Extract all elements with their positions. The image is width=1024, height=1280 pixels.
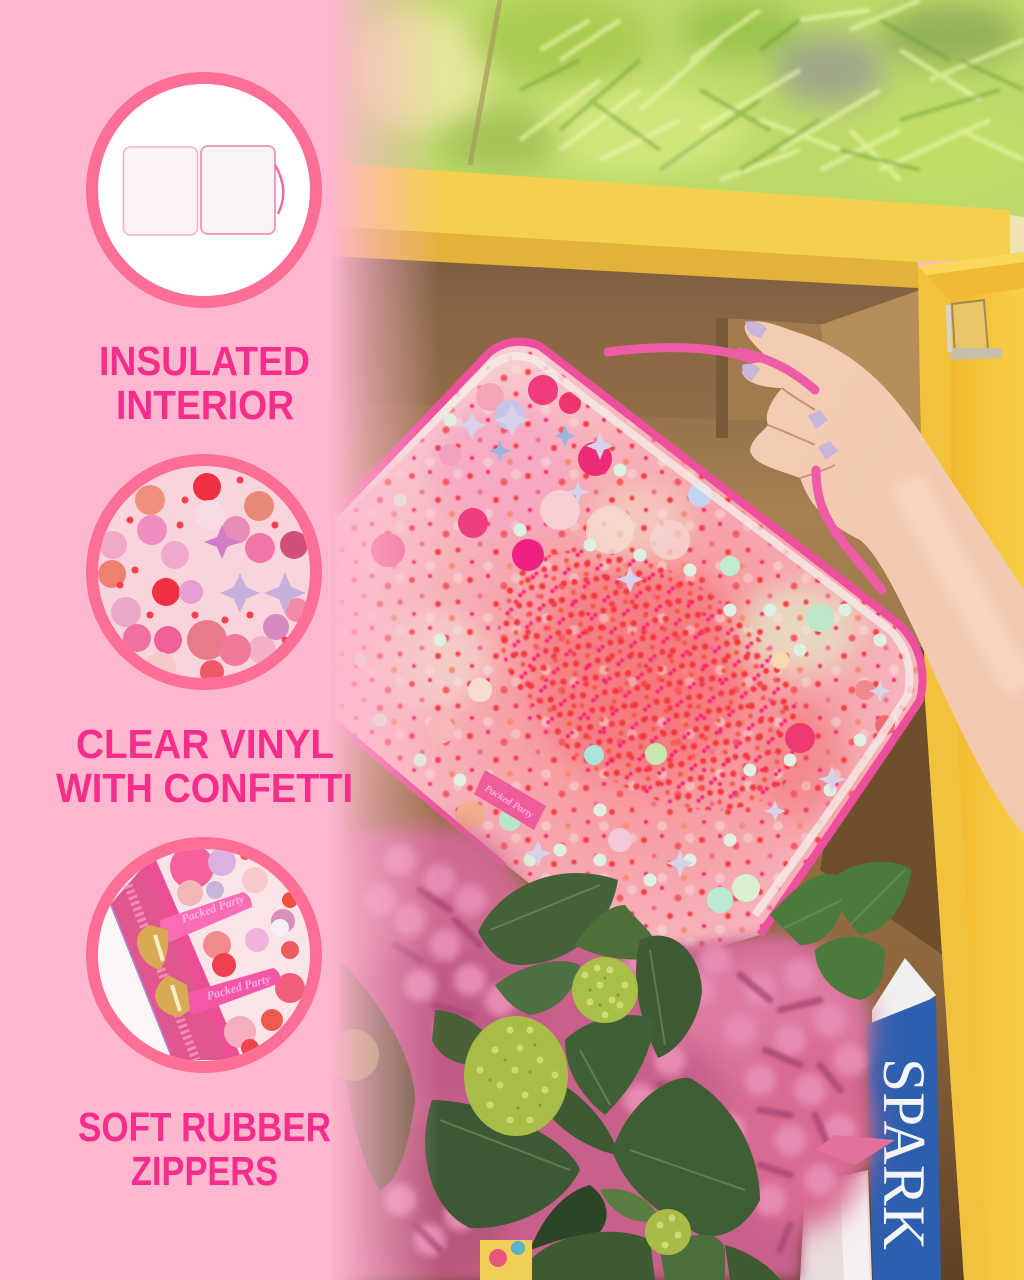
large confetti <box>371 375 895 913</box>
open bag right panel <box>201 146 275 234</box>
stipple confetti <box>340 351 918 947</box>
lower books <box>800 1170 872 1280</box>
small colourful book <box>480 1240 532 1280</box>
heading: WITH CONFETTI <box>56 765 353 811</box>
heading: ZIPPERS <box>131 1148 278 1194</box>
heading <box>56 721 353 811</box>
heading: SOFT RUBBER <box>78 1104 331 1150</box>
open bag left panel <box>124 147 198 235</box>
brand on pull: Packed Party <box>205 971 273 1003</box>
arm and hand <box>742 321 1024 835</box>
bag pink zipper edge <box>335 342 922 935</box>
leaf veins <box>440 870 905 1190</box>
feature 3: soft rubber zippers <box>78 837 331 1194</box>
bag white inner edge <box>335 356 910 915</box>
door latch <box>948 300 1002 360</box>
handle <box>608 348 882 590</box>
blue book <box>866 958 941 1280</box>
stars <box>457 404 891 877</box>
fingernails <box>742 321 838 460</box>
light petals <box>380 860 850 1240</box>
feature 1: insulated interior <box>86 72 322 428</box>
heading <box>99 338 310 428</box>
brand tag <box>474 770 546 830</box>
locker door <box>918 252 1024 1280</box>
locker top rim <box>330 163 1024 288</box>
icon ring: zipper close-up <box>86 837 322 1073</box>
handle strap over hand <box>740 352 882 590</box>
heading: INTERIOR <box>116 382 294 428</box>
hydrangea leaves <box>339 862 912 1280</box>
brand tag: Packed Party <box>482 783 535 821</box>
feature 2: clear vinyl with confetti <box>56 454 353 811</box>
pale iridescent dots <box>360 420 880 880</box>
dark petal gaps <box>395 890 840 1250</box>
open bag handle <box>275 165 283 214</box>
lunch bag <box>330 340 930 980</box>
icon ring: confetti close-up <box>86 454 322 690</box>
pink highlight petal <box>815 1135 895 1165</box>
dense red dots <box>497 549 798 811</box>
green hydrangea buds <box>327 957 691 1255</box>
foliage background <box>330 0 1024 225</box>
fade from pink panel to photo <box>330 0 440 1280</box>
heading <box>78 1104 331 1194</box>
heading: CLEAR VINYL <box>76 721 334 767</box>
book title: SPARK <box>871 1058 937 1250</box>
locker interior <box>330 250 1024 1280</box>
heading: INSULATED <box>99 338 310 384</box>
hydrangea flowers <box>335 825 895 1280</box>
zipper pulls <box>137 891 280 1017</box>
photo: lunch bag in yellow locker <box>327 0 1024 1280</box>
brand on pull: Packed Party <box>179 891 247 926</box>
icon ring: open bag <box>86 72 322 308</box>
